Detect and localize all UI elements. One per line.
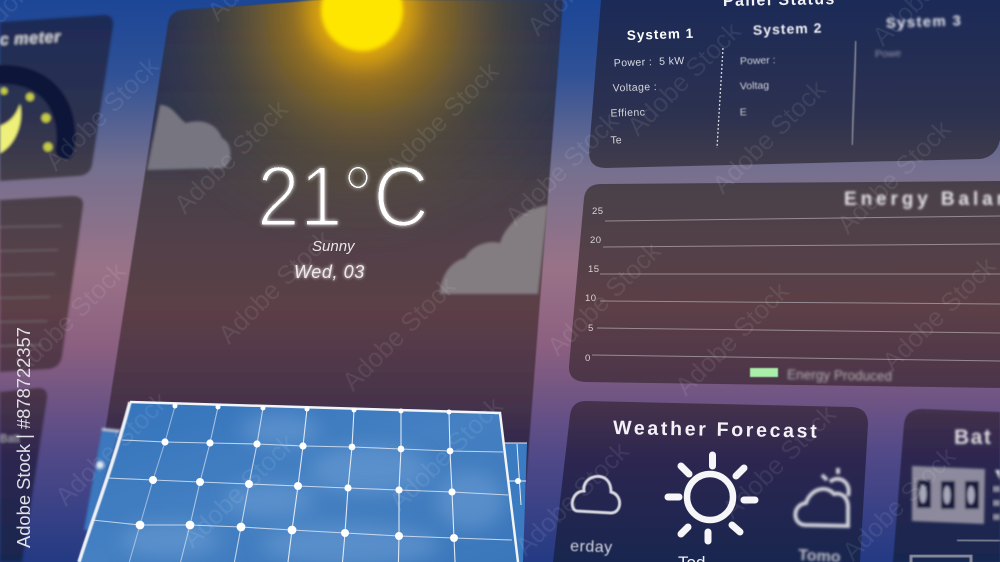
rear right cell lines (498, 443, 527, 505)
stock watermarks: Adobe Stock (499, 105, 625, 231)
icon: sun today (668, 455, 755, 541)
tomorrow sun arc (830, 479, 849, 496)
stock watermarks: Adobe Stock (716, 398, 842, 524)
label yesterday: erday (570, 538, 613, 556)
chart grid lines (592, 216, 1000, 361)
cell junction nodes (136, 404, 458, 542)
panel: weather forecast (553, 401, 868, 562)
tomorrow rays (822, 468, 838, 480)
stock watermarks: Adobe Stock (621, 15, 747, 141)
temperature reading: 21°C (257, 149, 429, 245)
battery divider (957, 540, 1000, 541)
sun glow (120, 0, 563, 330)
chart axis labels (585, 206, 604, 364)
system 2 voltage: Voltag (740, 79, 769, 92)
lower left label: Batt (0, 433, 20, 445)
bank cells (917, 480, 979, 509)
stock watermarks: Adobe Stock (6, 255, 132, 381)
sun rays (668, 455, 755, 541)
system 1 power: Power : (614, 56, 652, 69)
chart axis labels: 0 (585, 353, 591, 364)
solid divider 2 (852, 41, 856, 145)
system 3 column (874, 12, 963, 60)
left chart shape (0, 196, 83, 372)
system 2 heading: System 2 (753, 20, 823, 38)
panel: panel status (589, 0, 1000, 168)
panel frame top and right (130, 402, 518, 562)
rear left panel surface (84, 429, 120, 530)
panel: main weather (85, 0, 563, 562)
stock watermarks: Adobe Stock (379, 55, 505, 181)
stock watermarks: Adobe Stock (669, 275, 795, 401)
icon: left cloud (147, 105, 231, 170)
battery panel shape (893, 409, 1000, 562)
chart axis labels: 10 (585, 293, 597, 304)
gauge arc (0, 74, 66, 150)
stock watermarks: Adobe Stock (176, 427, 302, 553)
stock watermarks: Adobe Stock (509, 435, 635, 561)
main panel shape (85, 0, 563, 562)
stock watermarks: Adobe Stock (831, 113, 957, 239)
dotted divider 1 (717, 48, 723, 148)
chart axis labels: 15 (588, 264, 600, 275)
system 1 column (607, 26, 698, 147)
stock watermarks: Adobe Stock (706, 73, 832, 199)
system 2 column (737, 20, 825, 119)
stock watermarks: Adobe Stock (168, 93, 294, 219)
solar panel: rear left (84, 429, 120, 530)
panel: lower left (0, 388, 47, 562)
system 1 power: 5 kW (656, 55, 685, 68)
system 2 efficiency: E (740, 106, 747, 119)
forecast title: Weather Forecast (613, 417, 819, 443)
meter title: c meter (0, 29, 61, 49)
rear left top frame (102, 429, 120, 431)
rear right node (515, 478, 521, 484)
chart axis labels: 5 (588, 323, 594, 334)
solar panel: rear right (498, 443, 527, 562)
tomorrow cloud (795, 489, 848, 526)
panel: dc meter (0, 15, 113, 181)
gauge needle moon (0, 104, 21, 153)
icon: cloud tomorrow (795, 468, 849, 526)
panel cloud reflections (120, 412, 505, 562)
gauge ticks (0, 88, 52, 152)
stock watermarks: Adobe Stock (49, 385, 175, 511)
cell grid lines (92, 406, 512, 562)
stock watermarks: Adobe Stock (39, 50, 165, 176)
icon: cloud yesterday (572, 476, 620, 513)
forecast panel shape (553, 401, 868, 562)
energy title: Energy Balar (844, 189, 1000, 210)
left chart lines (0, 226, 62, 346)
icon: battery bank (912, 466, 985, 524)
system 3 power: Powe (875, 47, 902, 60)
legend swatch (750, 368, 778, 377)
rear left node (96, 462, 104, 468)
system 1 voltage: Voltage : (612, 81, 657, 95)
stock watermarks: Adobe Stock (212, 223, 338, 349)
system 1 temperature: Te (610, 134, 622, 147)
date label: Wed, 03 (294, 262, 365, 282)
chart axis labels: 25 (592, 206, 604, 217)
system 2 power: Power : (740, 54, 776, 67)
stock id caption: Adobe Stock | #878722357 (13, 327, 34, 548)
panel: left chart (0, 196, 83, 372)
bank charge marks (920, 485, 974, 504)
energy panel shape (569, 181, 1000, 388)
solar panel: front (78, 402, 518, 562)
condition label: Sunny (312, 238, 356, 255)
icon: sun (321, 0, 403, 51)
panel: energy balance (569, 181, 1000, 388)
chart axis labels: 20 (590, 235, 602, 246)
front panel surface (78, 402, 518, 562)
stock watermarks: Adobe Stock (383, 390, 509, 516)
rear right panel surface (498, 443, 527, 562)
legend label: Energy Produced (787, 367, 892, 384)
panel frame left (79, 402, 130, 562)
stock watermarks: Adobe Stock (541, 235, 667, 361)
stock watermarks: Adobe Stock (876, 250, 1000, 376)
system 3 heading: System 3 (886, 12, 962, 32)
meter panel shape (0, 15, 113, 181)
system 1 heading: System 1 (627, 26, 694, 43)
icon: sun halo (306, 0, 418, 66)
status panel shape (589, 0, 1000, 168)
panel: battery (893, 409, 1000, 562)
bank frame (912, 466, 985, 524)
system 1 efficiency: Effienc (610, 106, 645, 120)
lower left shape (0, 388, 47, 562)
battery title: Bat (954, 426, 992, 449)
battery second unit (911, 556, 971, 562)
icon: right cloud (440, 205, 548, 294)
battery side details (993, 470, 1000, 520)
stock watermarks: Adobe Stock (336, 270, 462, 396)
sun ring (687, 474, 733, 520)
